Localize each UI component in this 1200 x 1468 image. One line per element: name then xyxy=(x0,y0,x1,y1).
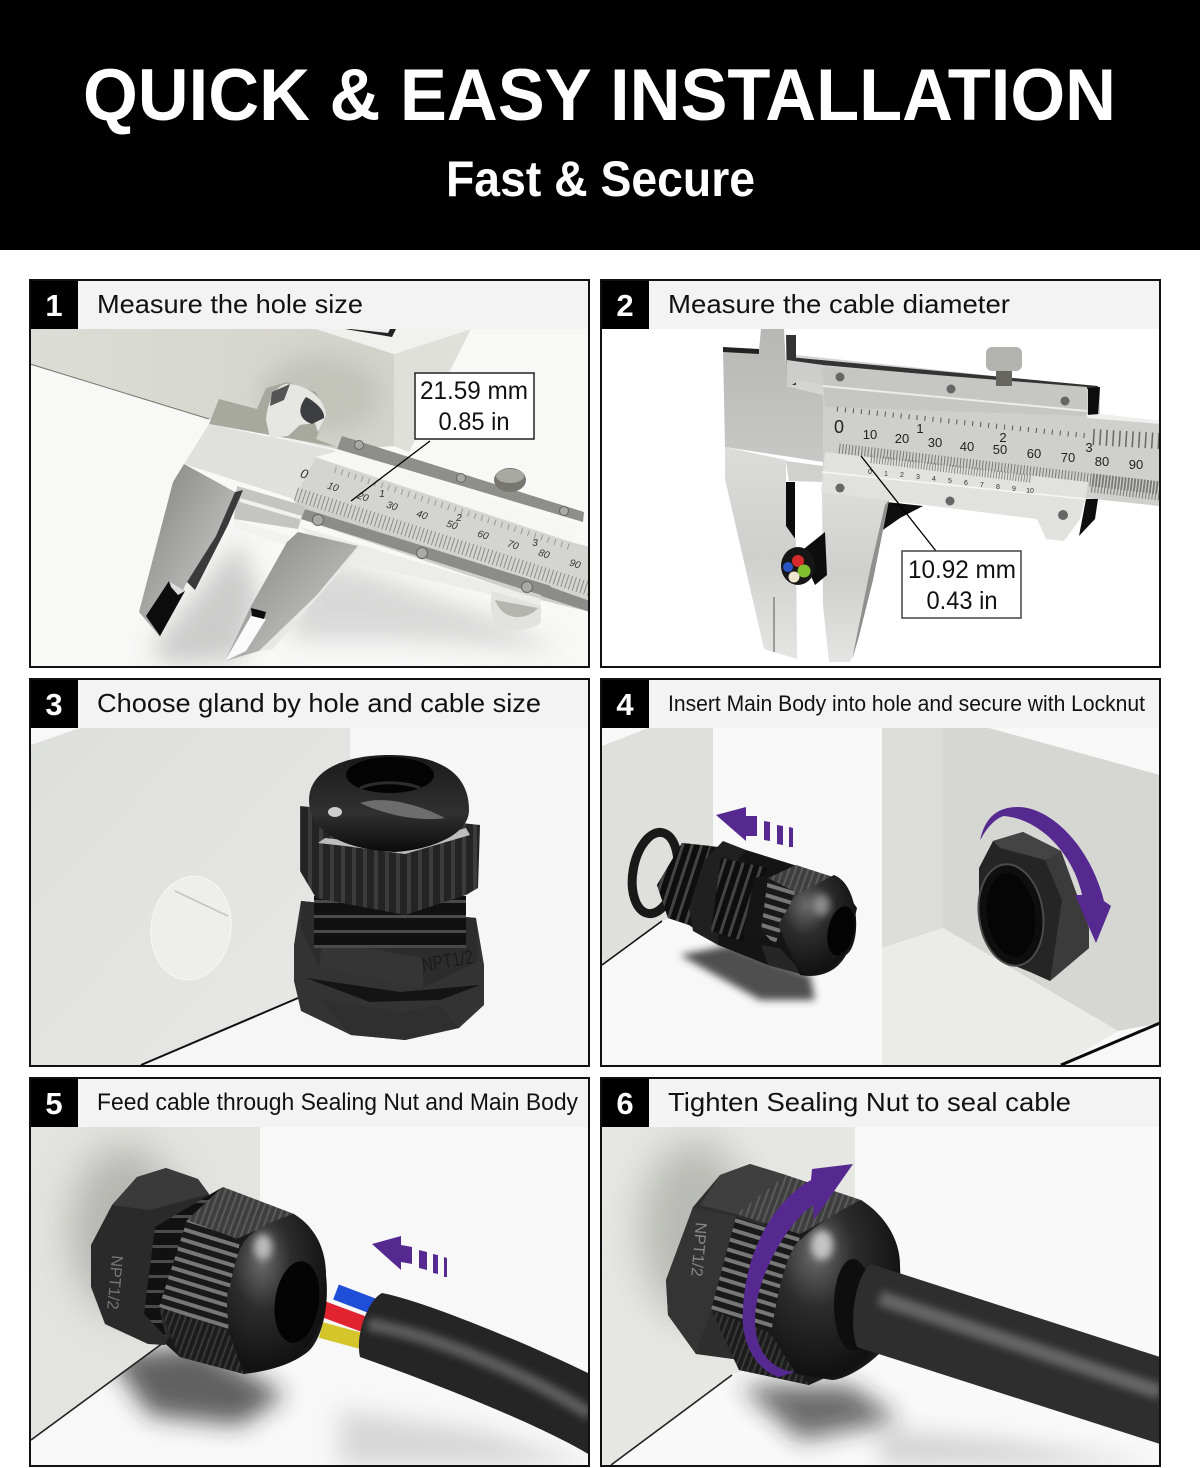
illustration: caliper on enclosure: 70 xyxy=(506,539,520,553)
illustration: caliper measuring cable: 1 xyxy=(884,471,888,478)
illustration: caliper measuring cable: 50 xyxy=(993,442,1007,457)
callout: cable diameter reading xyxy=(902,551,1021,618)
step number 6: 6 xyxy=(616,1086,634,1121)
illustration: caliper measuring cable: 40 xyxy=(960,439,974,454)
enclosure hole xyxy=(150,876,232,980)
callout: cable diameter reading: 0.43 in xyxy=(926,587,998,615)
arrow: locknut rotation xyxy=(980,807,1111,943)
panel: step 6 tighten sealing nut xyxy=(601,1078,1160,1466)
panel: step 3 choose gland xyxy=(30,679,589,1066)
illustration: caliper on enclosure: 10 xyxy=(326,481,340,495)
cable cross-section xyxy=(781,532,827,585)
illustration: caliper measuring cable: 4 xyxy=(932,476,936,483)
panel: step 5 feed cable xyxy=(30,1078,590,1466)
illustration: caliper measuring cable: 0 xyxy=(834,417,844,437)
illustration: caliper measuring cable: 7 xyxy=(980,482,984,489)
step 5 heading: Feed cable through Sealing Nut and Main Body xyxy=(97,1089,578,1116)
illustration: caliper on enclosure: 60 xyxy=(476,529,490,543)
step 3 heading: Choose gland by hole and cable size xyxy=(97,688,541,718)
panel: step 2 measure the cable diameter xyxy=(601,280,1160,667)
illustration: caliper on enclosure: 20 xyxy=(355,490,370,505)
illustration: caliper measuring cable: 2 xyxy=(900,472,904,479)
illustration: caliper measuring cable: 5 xyxy=(948,478,952,485)
illustration: caliper measuring cable xyxy=(723,329,1159,662)
illustration: caliper on enclosure: 90 xyxy=(568,558,582,572)
step number 6 xyxy=(601,1078,649,1127)
step 2 heading: Measure the cable diameter xyxy=(668,289,1010,319)
illustration: caliper measuring cable: 80 xyxy=(1095,454,1109,469)
step number 1: 1 xyxy=(45,288,63,323)
illustration: caliper on enclosure: 80 xyxy=(537,548,551,562)
illustration: caliper on enclosure: 3 xyxy=(532,538,538,549)
illustration: caliper on enclosure: 0 xyxy=(299,465,311,482)
panel: step 4 insert main body xyxy=(601,679,1160,1066)
illustration: caliper on enclosure: 2 xyxy=(455,513,462,524)
illustration: caliper measuring cable: 30 xyxy=(928,435,942,450)
panel: step 1 measure the hole size xyxy=(30,280,590,667)
step number 3: 3 xyxy=(45,687,63,722)
step number 2 xyxy=(601,280,649,329)
icon: gland on enclosure: NPT1/2 xyxy=(103,1255,125,1310)
rubber gasket ring xyxy=(626,829,684,917)
illustration: caliper on enclosure: 40 xyxy=(415,509,429,523)
step number 1 xyxy=(30,280,78,329)
illustration: caliper on enclosure: 30 xyxy=(385,500,399,514)
illustration: caliper measuring cable: 1 xyxy=(916,421,924,436)
illustration: caliper on enclosure: 1 xyxy=(379,489,385,500)
illustration: caliper on enclosure: 50 xyxy=(445,519,459,533)
icon: cable gland: NPT1/2 xyxy=(420,946,475,977)
step number 2: 2 xyxy=(616,288,634,323)
callout: hole size reading xyxy=(415,373,534,439)
icon: locknut xyxy=(972,832,1089,981)
step number 4 xyxy=(601,679,649,728)
step number 5: 5 xyxy=(45,1086,63,1121)
icon: cable gland xyxy=(294,755,484,1040)
step 1 heading: Measure the hole size xyxy=(97,289,363,319)
illustration: caliper measuring cable: 8 xyxy=(996,484,1000,491)
cable wires xyxy=(321,1292,378,1342)
knurled locking screw xyxy=(986,347,1022,386)
illustration: cable gland beside enclosure hole xyxy=(31,728,589,1065)
callout: cable diameter reading: 10.92 mm xyxy=(908,556,1016,584)
illustration: caliper measuring cable: 60 xyxy=(1027,446,1041,461)
step 6 heading: Tighten Sealing Nut to seal cable xyxy=(668,1087,1071,1117)
arrow: tightening rotation xyxy=(743,1164,853,1377)
illustration: caliper measuring cable: 10 xyxy=(863,427,877,442)
icon: gland main body xyxy=(657,841,859,976)
title: QUICK & EASY INSTALLATION xyxy=(83,55,1116,136)
header banner xyxy=(0,0,1200,250)
illustration: insert gland and locknut xyxy=(602,728,1160,1065)
subtitle: Fast & Secure xyxy=(446,151,755,207)
arrow: feed direction xyxy=(372,1236,447,1277)
illustration: caliper measuring cable: 3 xyxy=(1085,440,1093,455)
step 4 heading: Insert Main Body into hole and secure with Locknut xyxy=(668,691,1145,716)
cable xyxy=(359,1293,590,1455)
illustration: caliper measuring cable: 90 xyxy=(1129,457,1143,472)
cable xyxy=(853,1264,1160,1444)
illustration: caliper on enclosure xyxy=(30,329,590,666)
illustration: caliper measuring cable: 9 xyxy=(1012,486,1016,493)
icon: gland on enclosure xyxy=(91,1168,327,1374)
step number 5 xyxy=(30,1078,78,1127)
illustration: caliper measuring cable: 2 xyxy=(999,430,1007,445)
illustration: caliper measuring cable: 70 xyxy=(1061,450,1075,465)
icon: gland tightened xyxy=(666,1164,900,1385)
illustration: caliper measuring cable: 20 xyxy=(895,431,909,446)
illustration: caliper measuring cable: 6 xyxy=(964,480,968,487)
illustration: caliper measuring cable: 10 xyxy=(1026,488,1034,495)
icon: gland tightened: NPT1/2 xyxy=(687,1222,709,1277)
step number 3 xyxy=(30,679,78,728)
callout: hole size reading: 0.85 in xyxy=(438,408,510,436)
step number 4: 4 xyxy=(616,687,634,722)
illustration: feed cable into gland xyxy=(31,1127,590,1465)
illustration: tighten sealing nut xyxy=(602,1127,1160,1465)
illustration: caliper measuring cable: 0 xyxy=(868,469,872,476)
callout: hole size reading: 21.59 mm xyxy=(420,377,528,405)
arrow: insert direction xyxy=(716,807,793,847)
illustration: caliper measuring cable: 3 xyxy=(916,474,920,481)
